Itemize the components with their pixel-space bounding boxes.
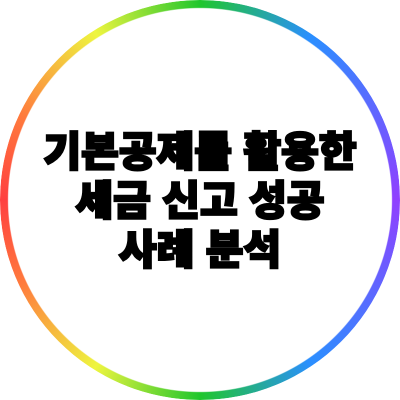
title line 3: 사례 분석 bbox=[119, 227, 281, 273]
title line 1: 기본공제를 활용한 bbox=[43, 129, 357, 175]
title line 2: 세금 신고 성공 bbox=[75, 178, 325, 224]
